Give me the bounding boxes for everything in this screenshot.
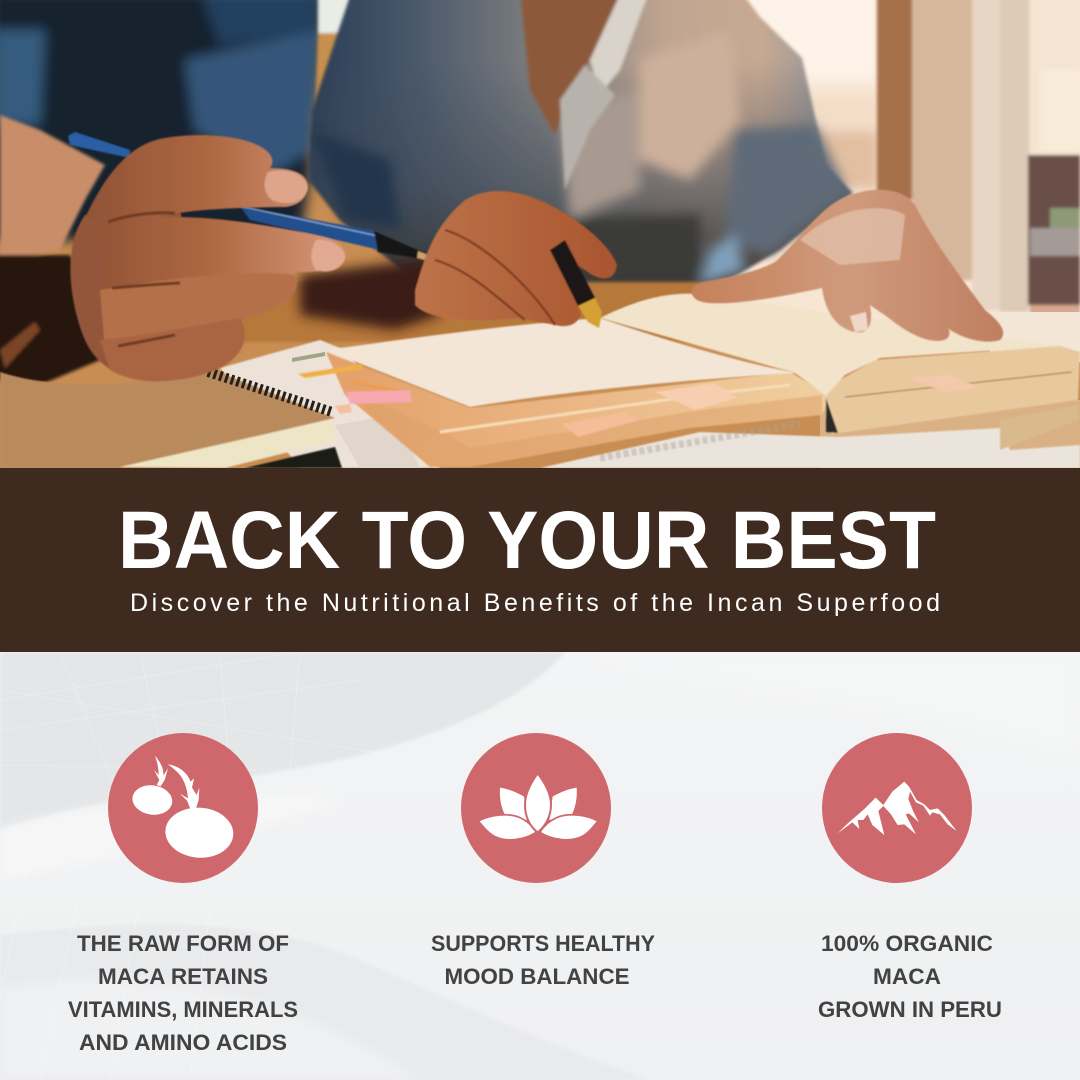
- heading: BACK TO YOUR BEST: [118, 495, 936, 586]
- bottom-right papers: [540, 405, 1080, 468]
- label: organic maca: MACA: [873, 964, 941, 989]
- label: the raw form of maca: THE RAW FORM OF: [77, 931, 289, 956]
- gap between people: [314, 0, 351, 104]
- book: left page: [326, 318, 798, 407]
- spiral binding: [208, 372, 332, 412]
- forearm of writer: [300, 258, 440, 330]
- sticky tabs: [298, 364, 980, 437]
- right person's shirt: [308, 0, 853, 285]
- left person's shirt: [0, 0, 325, 240]
- book: right block: [600, 294, 1080, 434]
- writing hand with gold pen: [415, 191, 617, 328]
- label: the raw form of maca: [68, 931, 298, 1055]
- big hand holding a pen: [70, 135, 346, 381]
- label: organic maca: 100% ORGANIC: [821, 931, 993, 956]
- table: [230, 282, 730, 342]
- icon: lotus in circle: [461, 733, 611, 883]
- flat right hand: [692, 190, 1003, 342]
- label: the raw form of maca: MACA RETAINS: [98, 964, 268, 989]
- left arm: [0, 115, 105, 385]
- loose papers under notepad: [220, 340, 440, 468]
- subtitle: Discover the Nutritional Benefits of the Incan Superfood: [130, 589, 940, 617]
- label: mood balance: [431, 931, 655, 989]
- window background: [700, 0, 1080, 330]
- label: organic maca: [818, 931, 1002, 1022]
- label: mood balance: MOOD BALANCE: [444, 964, 630, 989]
- icon: mountains in circle: [822, 733, 972, 883]
- lower background panel: [1, 652, 561, 1078]
- label: the raw form of maca: AND AMINO ACIDS: [79, 1030, 287, 1055]
- title band: [0, 468, 1080, 652]
- photo: two people reading a book at a table: [0, 0, 1080, 470]
- label: the raw form of maca: VITAMINS, MINERALS: [68, 997, 298, 1022]
- neck: [520, 0, 650, 190]
- label: mood balance: SUPPORTS HEALTHY: [431, 931, 655, 956]
- pen in big hand: [68, 132, 434, 262]
- icon: maca roots in circle: [108, 733, 258, 883]
- curtain and chair: [877, 0, 1080, 320]
- label: organic maca: GROWN IN PERU: [818, 997, 1002, 1022]
- book: left block: [326, 352, 830, 467]
- notepad: [0, 368, 342, 468]
